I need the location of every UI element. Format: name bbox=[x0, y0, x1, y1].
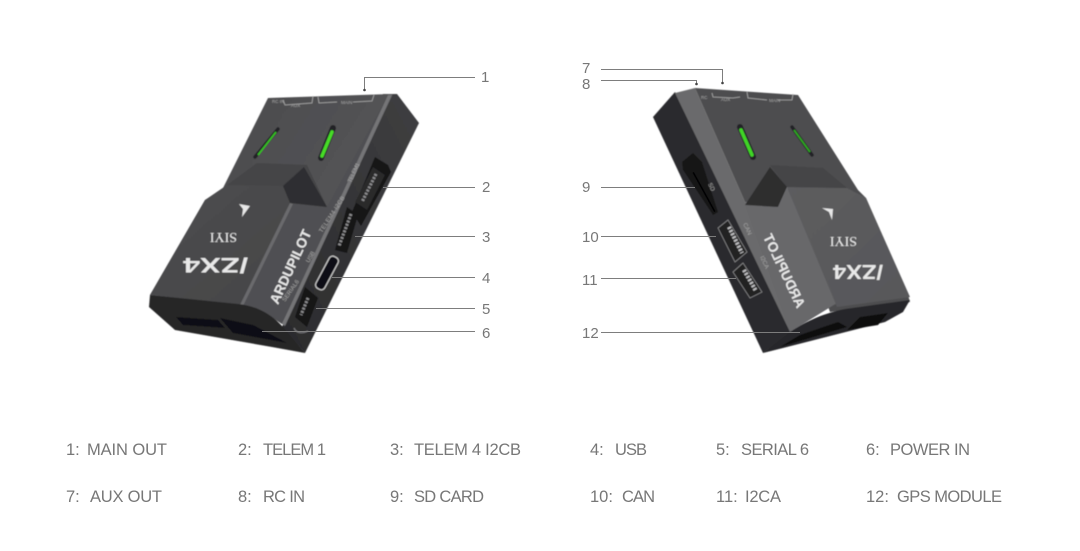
legend row 2: RC IN bbox=[263, 488, 305, 506]
top edge silk labels: RC IN bbox=[272, 99, 284, 104]
SERIAL 6 port bbox=[282, 279, 318, 327]
right device front cap bbox=[787, 187, 910, 307]
legend row 2: I2CA bbox=[745, 488, 781, 506]
ArduPilot logo: ARDUPILOT bbox=[266, 227, 315, 306]
left device: flight controller, USB side bbox=[149, 94, 419, 353]
legend row 2: 7: bbox=[66, 488, 80, 506]
flight controller logo: /ZX4 bbox=[832, 260, 883, 282]
callout lines and numbers: right device bbox=[582, 60, 800, 342]
left LED slot 2 bbox=[321, 128, 333, 158]
callout 2: 2 bbox=[482, 179, 490, 196]
legend row 2: 11: bbox=[716, 488, 738, 506]
legend row 2: CAN bbox=[622, 488, 655, 506]
legend row 1: USB bbox=[615, 441, 647, 459]
arrow mark bbox=[239, 204, 250, 217]
legend row 1: 3: bbox=[390, 441, 404, 459]
legend row 2: SD CARD bbox=[414, 488, 484, 506]
SIYI logo: SIYI bbox=[829, 233, 857, 248]
right LED slot bbox=[740, 127, 753, 157]
right device side wall bbox=[653, 92, 792, 353]
legend row 2: 8: bbox=[238, 488, 252, 506]
legend row 1: MAIN OUT bbox=[87, 441, 167, 459]
ArduPilot logo: ARDUPILOT bbox=[760, 231, 809, 310]
left LED slot bbox=[255, 129, 278, 157]
top edge silk labels: MAIN bbox=[341, 100, 352, 105]
callout 7 bbox=[582, 60, 724, 84]
legend row 2 bbox=[66, 488, 1002, 506]
top edge silk labels: RC bbox=[701, 95, 708, 100]
right device raised centre block bbox=[770, 165, 847, 188]
legend row 2: GPS MODULE bbox=[897, 488, 1002, 506]
callout 5: 5 bbox=[482, 301, 490, 318]
legend row 1: SERIAL 6 bbox=[741, 441, 809, 459]
legend row 2: AUX OUT bbox=[90, 488, 162, 506]
legend row 1: 6: bbox=[866, 441, 880, 459]
TELEM1 port: TELEM1 bbox=[347, 162, 362, 184]
callout 1: 1 bbox=[481, 69, 489, 86]
flight controller logo: /ZX4 bbox=[183, 253, 248, 276]
callout 9: 9 bbox=[582, 179, 590, 196]
legend row 1: 5: bbox=[716, 441, 730, 459]
power connector notch bbox=[294, 328, 308, 333]
top edge silk labels bbox=[701, 92, 793, 103]
callout 4: 4 bbox=[482, 270, 490, 287]
I2CA port: I2CA bbox=[758, 255, 769, 270]
callout 2 bbox=[383, 179, 490, 196]
legend row 1: TELEM 4 I2CB bbox=[414, 441, 521, 459]
TELEM1 port bbox=[347, 157, 391, 226]
callout 8 bbox=[582, 76, 698, 93]
right LED slot 2 bbox=[792, 127, 812, 155]
SERIAL 6 port: SERIAL6 bbox=[282, 279, 301, 303]
callout 8: 8 bbox=[582, 76, 590, 93]
left device raised block dark facet bbox=[283, 167, 327, 207]
legend row 2: 9: bbox=[390, 488, 404, 506]
callout 3 bbox=[355, 229, 490, 246]
callout 3: 3 bbox=[482, 229, 490, 246]
legend row 2: 12: bbox=[866, 488, 889, 506]
right device light edge band bbox=[675, 88, 790, 332]
callout 10: 10 bbox=[582, 229, 599, 246]
CAN port: CAN bbox=[741, 222, 752, 236]
legend row 1: 2: bbox=[238, 441, 252, 459]
left device panel stripe bbox=[240, 203, 293, 306]
left device front cap bbox=[150, 185, 290, 305]
USB port bbox=[306, 251, 340, 291]
left device ArduPilot panel bbox=[240, 95, 388, 324]
legend row 1 bbox=[66, 441, 970, 459]
left device raised centre block bbox=[227, 163, 327, 207]
right device raised block dark facet bbox=[745, 167, 787, 207]
I2CA port bbox=[733, 255, 769, 298]
legend row 2: 10: bbox=[590, 488, 613, 506]
callout 12: 12 bbox=[582, 325, 599, 342]
callout 7: 7 bbox=[582, 60, 590, 77]
legend row 1: POWER IN bbox=[890, 441, 970, 459]
legend bbox=[66, 441, 1002, 506]
left device side wall bbox=[282, 94, 419, 353]
callout 9 bbox=[582, 179, 695, 196]
legend row 1: TELEM 1 bbox=[263, 441, 326, 459]
legend row 1: 4: bbox=[590, 441, 604, 459]
callout lines and numbers: left device bbox=[262, 69, 490, 342]
TELEM4 I2CB port bbox=[319, 196, 358, 253]
top edge silk labels: MAIN bbox=[769, 98, 780, 103]
callout 10 bbox=[582, 229, 716, 246]
TELEM4 I2CB port: TELEM4 I2CB bbox=[319, 196, 347, 234]
left device top face bbox=[150, 94, 393, 324]
power in port openings bbox=[176, 317, 287, 343]
CAN port bbox=[718, 220, 752, 262]
SIYI logo: SIYI bbox=[209, 229, 237, 244]
SD card slot bbox=[682, 153, 718, 215]
USB port: USB bbox=[306, 251, 317, 264]
top edge silk labels bbox=[272, 95, 374, 108]
left device front face with power port bbox=[149, 295, 305, 353]
right device front face with GPS port bbox=[763, 300, 910, 353]
SD card slot: SD bbox=[706, 182, 715, 193]
GPS module port openings bbox=[780, 313, 888, 347]
top edge silk labels: AUX bbox=[721, 97, 730, 102]
top edge silk labels: AUX bbox=[291, 103, 300, 108]
right device: flight controller, SD side bbox=[653, 88, 910, 353]
legend row 1: 1: bbox=[66, 441, 80, 459]
callout 6: 6 bbox=[482, 325, 490, 342]
callout 1 bbox=[363, 69, 489, 91]
arrow mark bbox=[822, 208, 833, 220]
right device top face bbox=[695, 88, 910, 312]
callout 11: 11 bbox=[582, 272, 598, 289]
right device ArduPilot panel bbox=[745, 187, 837, 332]
left device ridge highlight bbox=[282, 95, 392, 326]
